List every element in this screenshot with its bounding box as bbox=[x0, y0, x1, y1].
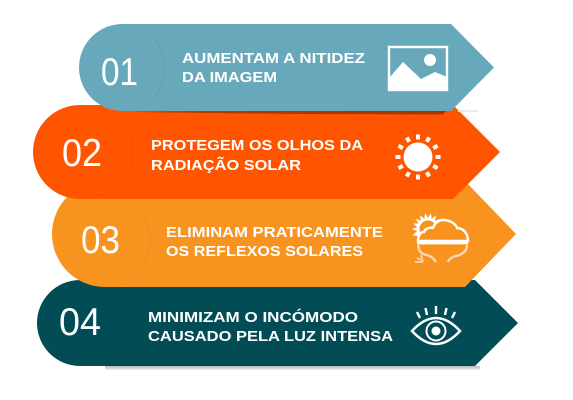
number 01: 01 bbox=[101, 51, 138, 94]
text: protegem: RADIAÇÃO SOLAR bbox=[151, 156, 302, 174]
panel: band 04 bbox=[37, 280, 518, 366]
number 04: 04 bbox=[59, 301, 101, 344]
number 03: 03 bbox=[81, 219, 120, 262]
panel: band 03 bbox=[52, 181, 516, 287]
panel: band 01 bbox=[79, 24, 494, 111]
panel: band 02 bbox=[33, 105, 500, 199]
icon: image bbox=[389, 47, 447, 90]
number 02: 02 bbox=[62, 132, 102, 175]
text: minimizam: CAUSADO PELA LUZ INTENSA bbox=[148, 329, 394, 345]
text: eliminam: ELIMINAM PRATICAMENTE bbox=[166, 225, 383, 241]
text: aumentam: DA IMAGEM bbox=[182, 70, 277, 86]
icon: eye bbox=[412, 306, 460, 344]
text: protegem: PROTEGEM OS OLHOS DA bbox=[151, 138, 364, 154]
icon: sun and cloud bbox=[412, 213, 468, 262]
text: eliminam: OS REFLEXOS SOLARES bbox=[166, 244, 363, 260]
text: minimizam: MINIMIZAM O INCÓMODO bbox=[148, 308, 358, 326]
icon: sun bbox=[396, 134, 440, 180]
text: aumentam: AUMENTAM A NITIDEZ bbox=[182, 51, 365, 67]
